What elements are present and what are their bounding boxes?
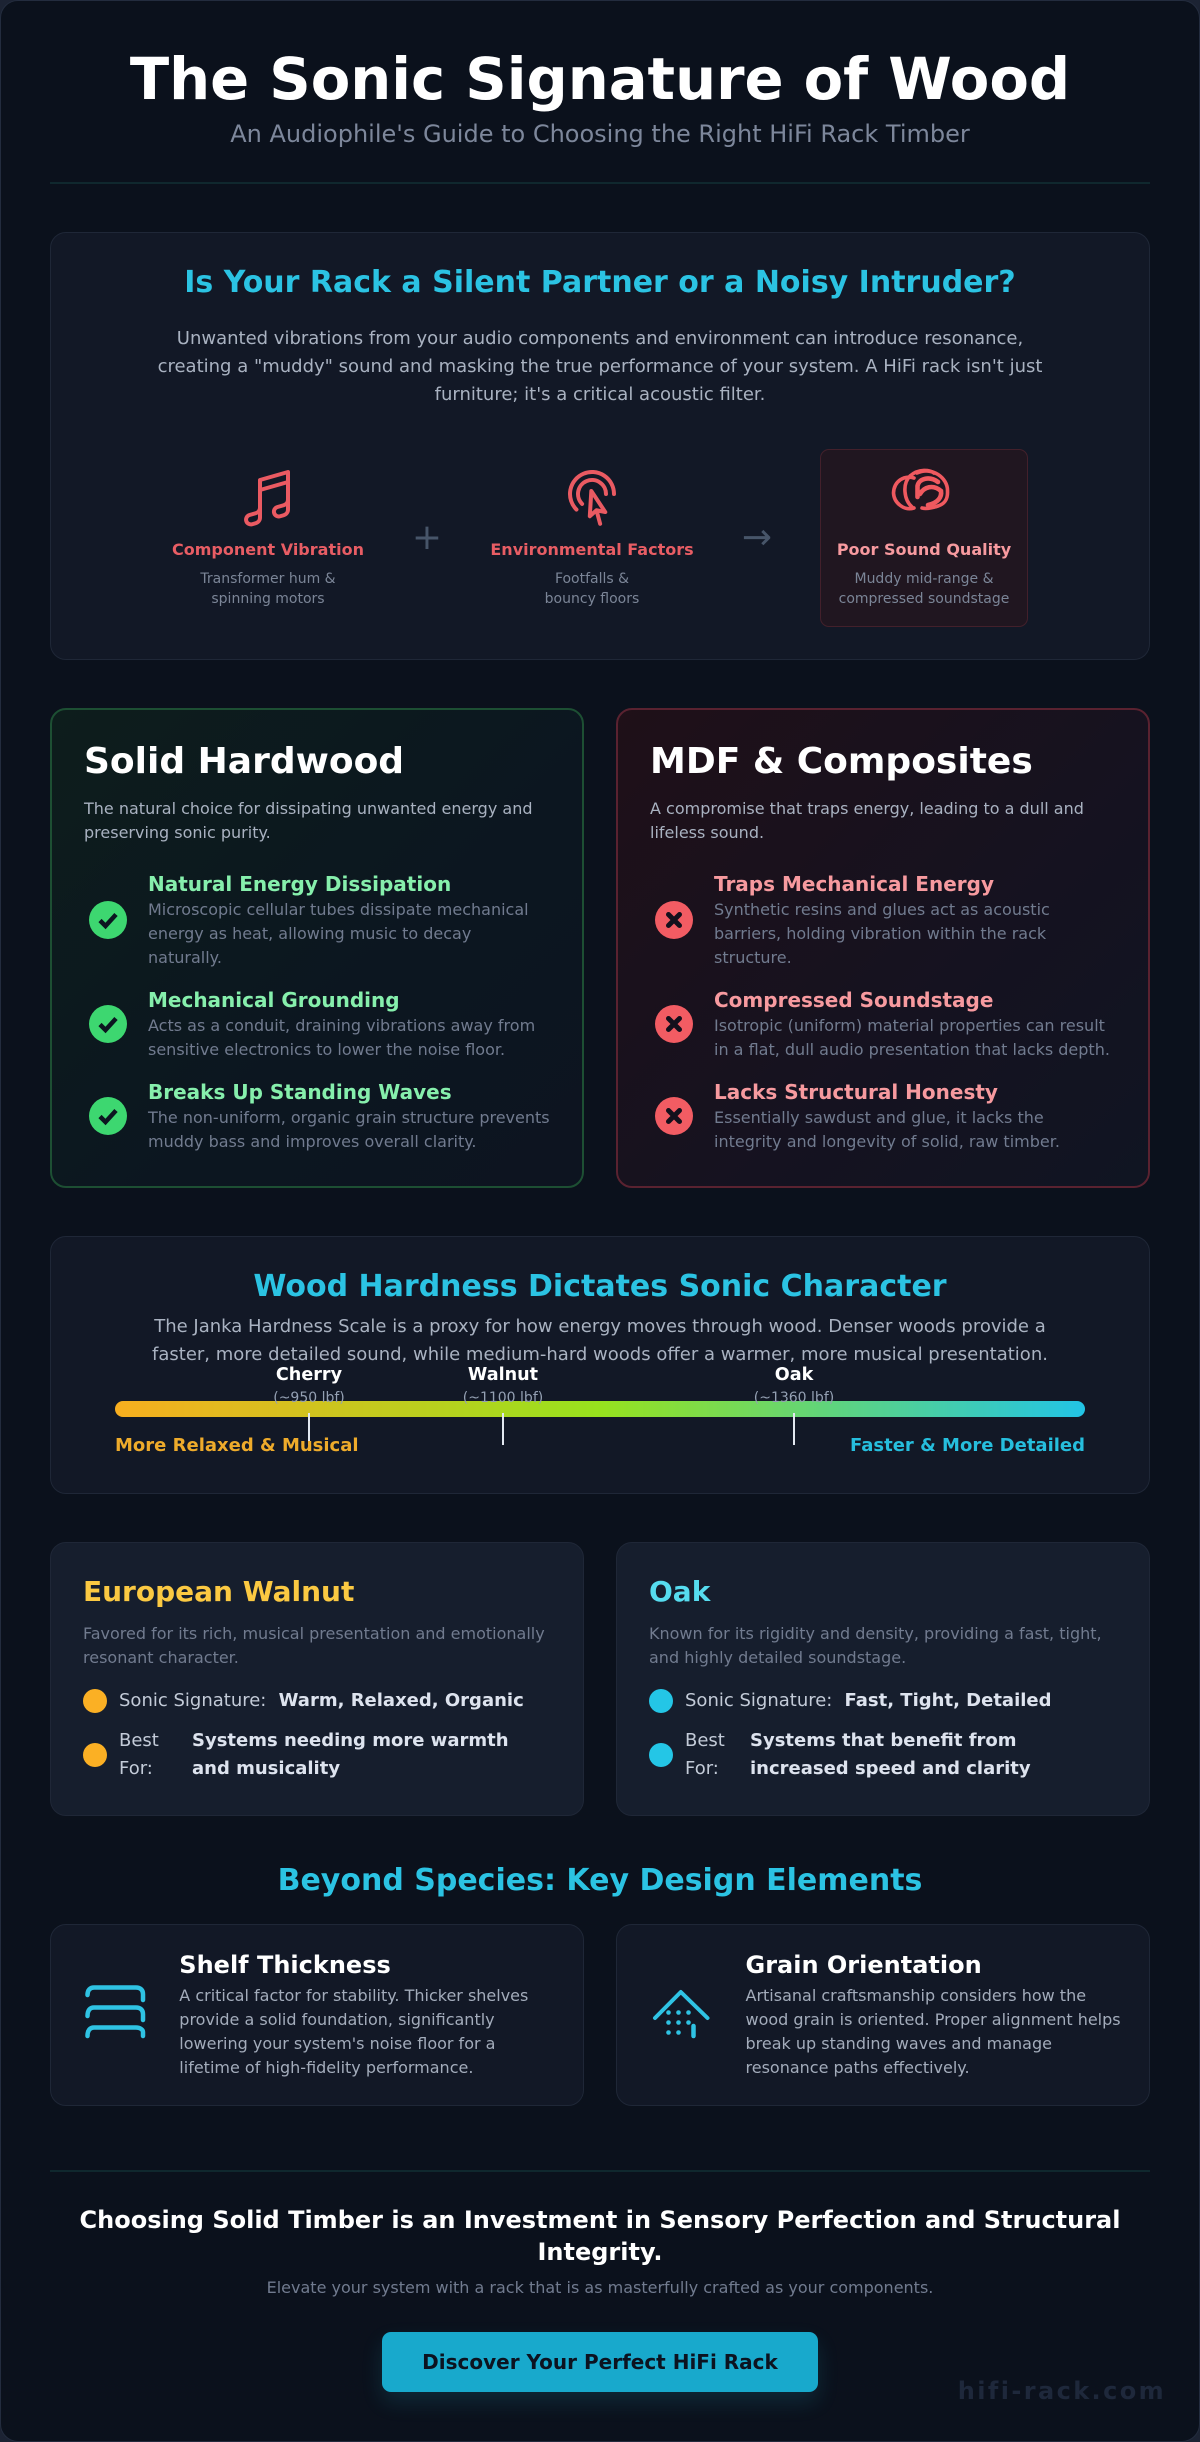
text: grain orientation: break up standing waves and manage xyxy=(746,2034,1052,2053)
label: poor sound quality: Poor Sound Quality xyxy=(837,540,1011,558)
text: environmental detail xyxy=(545,571,639,607)
panel: wood hardness scale xyxy=(50,1236,1150,1494)
value: oak best for: Systems that benefit from xyxy=(750,1730,1017,1751)
title: shelf thickness: Shelf Thickness xyxy=(179,1951,391,1979)
icon: cross 1 xyxy=(655,901,693,939)
text: grain orientation: Artisanal craftsmanship considers how the xyxy=(746,1986,1086,2005)
text: hardwood intro: The natural choice for dissipating unwanted energy and xyxy=(84,799,532,818)
subtitle: An Audiophile's Guide to Choosing the Right HiFi Rack Timber xyxy=(230,120,970,148)
text: shelf thickness: A critical factor for stability. Thicker shelves xyxy=(179,1986,528,2005)
marker value: walnut: (~1100 lbf) xyxy=(463,1390,543,1406)
text: environmental detail: Footfalls & xyxy=(555,571,629,587)
row: oak signature: Sonic Signature: xyxy=(685,1690,832,1711)
value: walnut best for: and musicality xyxy=(192,1758,340,1779)
text: component vibration detail xyxy=(200,571,336,607)
value: walnut best for xyxy=(192,1730,509,1779)
call-to-action button xyxy=(382,2332,818,2392)
text: vibrations intro: furniture; it's a critical acoustic filter. xyxy=(435,384,765,405)
feature text: Microscopic cellular tubes dissipate mechanical xyxy=(148,900,529,919)
row: walnut best for: For: xyxy=(119,1758,153,1779)
scale label: relaxed: More Relaxed & Musical xyxy=(115,1435,359,1456)
text: oak description: Known for its rigidity and density, providing a fast, tight, xyxy=(649,1624,1102,1643)
hardness gradient bar xyxy=(115,1401,1085,1417)
icon: distorted sound scribble xyxy=(892,468,950,510)
call-to-action button: Discover Your Perfect HiFi Rack xyxy=(422,2350,778,2374)
feature text: sensitive electronics to lower the noise floor. xyxy=(148,1040,505,1059)
feature text: Acts as a conduit, draining vibrations away from xyxy=(148,1016,535,1035)
text: component vibration detail: Transformer hum & xyxy=(200,571,336,587)
text: mdf intro: A compromise that traps energy, leading to a dull and xyxy=(650,799,1084,818)
text: walnut description xyxy=(83,1624,545,1667)
row: walnut best for xyxy=(119,1730,159,1779)
text: poor sound detail: compressed soundstage xyxy=(839,591,1009,607)
panel: oak xyxy=(616,1542,1150,1816)
value: walnut best for: Systems needing more warmth xyxy=(192,1730,509,1751)
icon: stacked shelves xyxy=(85,1985,146,2038)
text: vibrations intro: creating a "muddy" sound and masking the true performance of your system. A HiFi rack isn't just xyxy=(158,356,1042,377)
text: hardwood intro: preserving sonic purity. xyxy=(84,823,271,842)
arrow: → xyxy=(742,516,772,558)
row: oak best for xyxy=(685,1730,725,1779)
bullet: oak best for xyxy=(649,1743,673,1767)
icon: check 2 xyxy=(89,1005,127,1043)
text: oak description: and highly detailed soundstage. xyxy=(649,1648,906,1667)
feature title: natural energy dissipation: Natural Energy Dissipation xyxy=(148,872,451,896)
icon: grain roof xyxy=(652,1990,710,2038)
heading: oak: Oak xyxy=(649,1575,710,1608)
footer subtext: Elevate your system with a rack that is as masterfully crafted as your components. xyxy=(267,2278,933,2296)
feature text: structure. xyxy=(714,948,792,967)
feature text xyxy=(148,1016,535,1059)
title: grain orientation: Grain Orientation xyxy=(746,1951,982,1979)
feature text: naturally. xyxy=(148,948,222,967)
marker value: oak: (~1360 lbf) xyxy=(754,1390,834,1406)
text: grain orientation: resonance paths effectively. xyxy=(746,2058,970,2077)
label: environmental factors: Environmental Factors xyxy=(490,540,694,558)
marker: oak: Oak xyxy=(775,1364,813,1384)
text: shelf thickness: lowering your system's noise floor for a xyxy=(179,2034,495,2053)
feature title: lacks structural honesty: Lacks Structural Honesty xyxy=(714,1080,998,1104)
text: mdf intro: lifeless sound. xyxy=(650,823,764,842)
icon: check 3 xyxy=(89,1097,127,1135)
feature text: Essentially sawdust and glue, it lacks the xyxy=(714,1108,1044,1127)
feature text xyxy=(714,1016,1110,1059)
feature title: compressed soundstage: Compressed Soundstage xyxy=(714,988,993,1012)
feature text: Synthetic resins and glues act as acoustic xyxy=(714,900,1050,919)
feature text xyxy=(714,1108,1060,1151)
feature text: in a flat, dull audio presentation that lacks depth. xyxy=(714,1040,1110,1059)
heading: mdf: MDF & Composites xyxy=(650,740,1033,782)
marker: cherry: Cherry xyxy=(276,1364,342,1384)
row: walnut best for: Best xyxy=(119,1730,159,1751)
icon: cross 2 xyxy=(655,1005,693,1043)
feature title: traps mechanical energy: Traps Mechanical Energy xyxy=(714,872,994,896)
panel: shelf thickness xyxy=(50,1924,584,2106)
feature text xyxy=(148,1108,550,1151)
feature text xyxy=(714,900,1050,967)
scale label: faster: Faster & More Detailed xyxy=(850,1435,1085,1456)
feature text xyxy=(148,900,529,967)
text: walnut description: Favored for its rich, musical presentation and emotionally xyxy=(83,1624,545,1643)
text: vibrations intro xyxy=(158,328,1042,405)
title: The Sonic Signature of Wood xyxy=(130,46,1070,113)
feature title: breaks up standing waves: Breaks Up Standing Waves xyxy=(148,1080,452,1104)
text: walnut description: resonant character. xyxy=(83,1648,239,1667)
footer heading xyxy=(80,2206,1120,2266)
box: poor sound quality xyxy=(820,449,1028,627)
icon: music note xyxy=(244,470,290,526)
text: janka explanation xyxy=(152,1316,1048,1365)
value: oak signature: Fast, Tight, Detailed xyxy=(844,1690,1052,1711)
text: mdf intro xyxy=(650,799,1084,842)
text: grain orientation xyxy=(746,1986,1121,2077)
panel: grain orientation xyxy=(616,1924,1150,2106)
text: oak description xyxy=(649,1624,1102,1667)
panel: solid hardwood xyxy=(50,708,584,1188)
watermark: hifi-rack.com xyxy=(958,2377,1166,2405)
bullet: walnut best for xyxy=(83,1743,107,1767)
marker: walnut: Walnut xyxy=(468,1364,538,1384)
text: vibrations intro: Unwanted vibrations from your audio components and environment can introduce resonance, xyxy=(177,328,1023,349)
heading: european walnut: European Walnut xyxy=(83,1575,354,1608)
text: component vibration detail: spinning motors xyxy=(211,591,325,607)
icon: cursor ripple xyxy=(568,470,616,526)
marker value: cherry: (~950 lbf) xyxy=(273,1390,345,1406)
text: grain orientation: wood grain is oriented. Proper alignment helps xyxy=(746,2010,1121,2029)
icon: cross 3 xyxy=(655,1097,693,1135)
panel: mdf and composites xyxy=(616,708,1150,1188)
bullet: walnut signature xyxy=(83,1689,107,1713)
footer heading: Integrity. xyxy=(537,2238,663,2266)
label: component vibration: Component Vibration xyxy=(172,540,364,558)
row: oak best for: Best xyxy=(685,1730,725,1751)
text: shelf thickness: lifetime of high-fidelity performance. xyxy=(179,2058,473,2077)
feature text: integrity and longevity of solid, raw timber. xyxy=(714,1132,1060,1151)
feature title: mechanical grounding: Mechanical Grounding xyxy=(148,988,400,1012)
feature text: The non-uniform, organic grain structure prevents xyxy=(148,1108,550,1127)
feature text: muddy bass and improves overall clarity. xyxy=(148,1132,477,1151)
heading: silent partner: Is Your Rack a Silent Partner or a Noisy Intruder? xyxy=(184,264,1016,300)
panel: silent partner or noisy intruder xyxy=(50,232,1150,660)
bullet: oak signature xyxy=(649,1689,673,1713)
row: oak best for: For: xyxy=(685,1758,719,1779)
text: poor sound detail: Muddy mid-range & xyxy=(854,571,994,587)
text: janka explanation: faster, more detailed sound, while medium-hard woods offer a warmer, more musical presentation. xyxy=(152,1344,1048,1365)
plus sign: + xyxy=(412,516,442,558)
text: poor sound detail xyxy=(839,571,1009,607)
footer heading: Choosing Solid Timber is an Investment in Sensory Perfection and Structural xyxy=(80,2206,1120,2234)
text: janka explanation: The Janka Hardness Scale is a proxy for how energy moves through wood. Denser woods provide a xyxy=(154,1316,1046,1337)
heading: beyond species: Beyond Species: Key Design Elements xyxy=(278,1863,922,1898)
feature text: energy as heat, allowing music to decay xyxy=(148,924,471,943)
icon: check 1 xyxy=(89,901,127,939)
value: walnut signature: Warm, Relaxed, Organic xyxy=(279,1690,524,1711)
text: shelf thickness xyxy=(179,1986,528,2077)
text: shelf thickness: provide a solid foundation, significantly xyxy=(179,2010,495,2029)
heading: solid hardwood: Solid Hardwood xyxy=(84,740,404,782)
value: oak best for xyxy=(750,1730,1031,1779)
text: hardwood intro xyxy=(84,799,532,842)
value: oak best for: increased speed and clarity xyxy=(750,1758,1031,1779)
row: walnut signature: Sonic Signature: xyxy=(119,1690,266,1711)
feature text: Isotropic (uniform) material properties can result xyxy=(714,1016,1105,1035)
panel: european walnut xyxy=(50,1542,584,1816)
text: environmental detail: bouncy floors xyxy=(545,591,639,607)
heading: wood hardness: Wood Hardness Dictates Sonic Character xyxy=(253,1269,947,1304)
feature text: barriers, holding vibration within the rack xyxy=(714,924,1046,943)
